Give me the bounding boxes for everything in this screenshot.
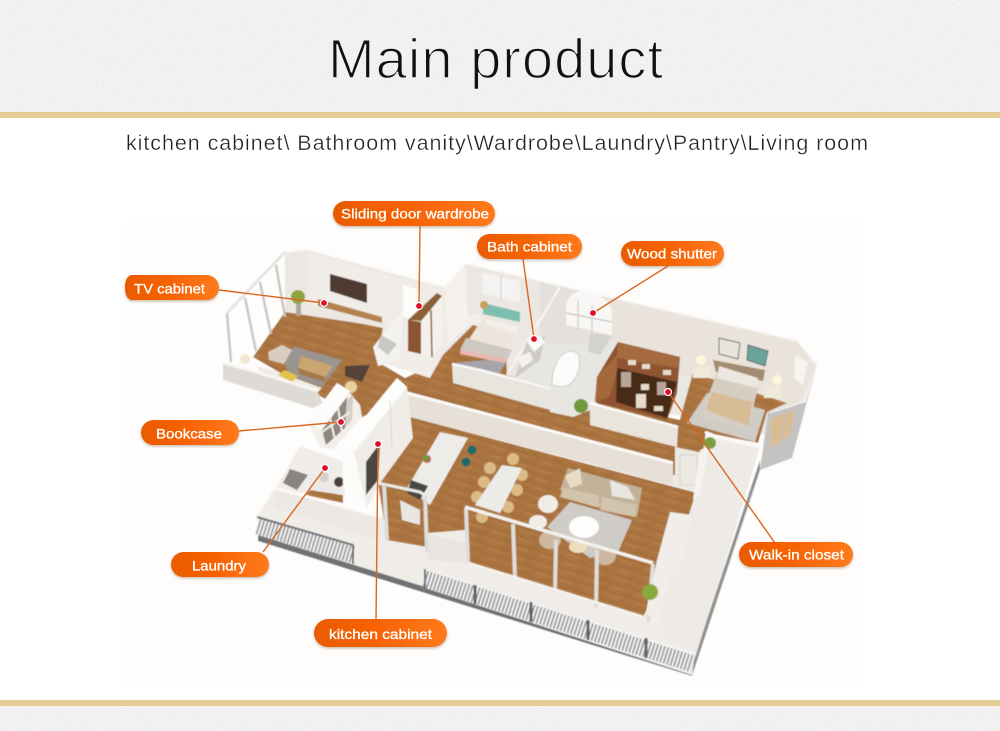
bedroom two <box>687 338 817 470</box>
callout: kitchen cabinet <box>314 440 447 647</box>
callout: Bath cabinet: Bath cabinet <box>487 238 572 254</box>
lavatory and wardrobe <box>373 273 448 378</box>
back walls <box>285 249 817 440</box>
plant <box>574 399 588 413</box>
armchair <box>345 365 370 382</box>
laundry and kitchen counter <box>275 446 380 540</box>
balcony railings <box>257 517 695 675</box>
vanity <box>515 337 545 378</box>
tv cabinet <box>315 306 383 328</box>
floor plan illustration <box>125 222 863 685</box>
front wall <box>223 363 323 408</box>
living room <box>223 252 383 408</box>
footer band <box>0 700 1000 731</box>
television <box>330 274 367 303</box>
glass wall posts <box>227 252 285 362</box>
corridor partition wall <box>407 393 673 485</box>
callout: kitchen cabinet: kitchen cabinet <box>329 626 432 642</box>
glass front wall <box>378 483 692 625</box>
callout: TV cabinet: TV cabinet <box>134 280 205 296</box>
walk-in closet <box>590 342 680 447</box>
callout: TV cabinet <box>125 275 328 306</box>
bathroom <box>507 291 678 447</box>
sofa and lounge <box>529 468 642 565</box>
callout: Bookcase <box>141 418 344 445</box>
front wall <box>452 363 550 410</box>
bedroom one <box>452 273 560 410</box>
sliding door wardrobe <box>408 293 442 321</box>
callout: Walk-in closet <box>664 388 853 567</box>
title: Main product <box>328 27 663 90</box>
callout: Sliding door wardrobe: Sliding door wardrobe <box>341 206 489 222</box>
subtitle: kitchen cabinet\ Bathroom vanity\Wardrobe\Laundry\Pantry\Living room <box>126 131 868 155</box>
window arch <box>566 291 612 335</box>
callout: Walk-in closet: Walk-in closet <box>749 546 844 562</box>
header band <box>0 0 1000 118</box>
rug and coffee table <box>280 347 342 387</box>
terrace slab <box>257 438 760 676</box>
main wood floors <box>253 312 787 617</box>
callout: Bath cabinet <box>477 234 582 342</box>
bookcase <box>308 383 362 450</box>
terrace top strip and door <box>655 432 760 668</box>
callout: Laundry <box>171 464 328 577</box>
sofa <box>258 366 322 398</box>
bathtub <box>552 351 580 387</box>
callout: Bookcase: Bookcase <box>156 426 222 442</box>
kitchen island <box>400 432 476 525</box>
callout: Laundry: Laundry <box>192 558 246 574</box>
dining set <box>471 453 528 523</box>
callout: Sliding door wardrobe <box>333 201 495 310</box>
callout: Wood shutter: Wood shutter <box>627 246 717 262</box>
end wall <box>646 512 692 625</box>
kitchen cabinet block <box>342 378 413 508</box>
plant <box>291 290 305 316</box>
callout: Wood shutter <box>590 241 724 316</box>
